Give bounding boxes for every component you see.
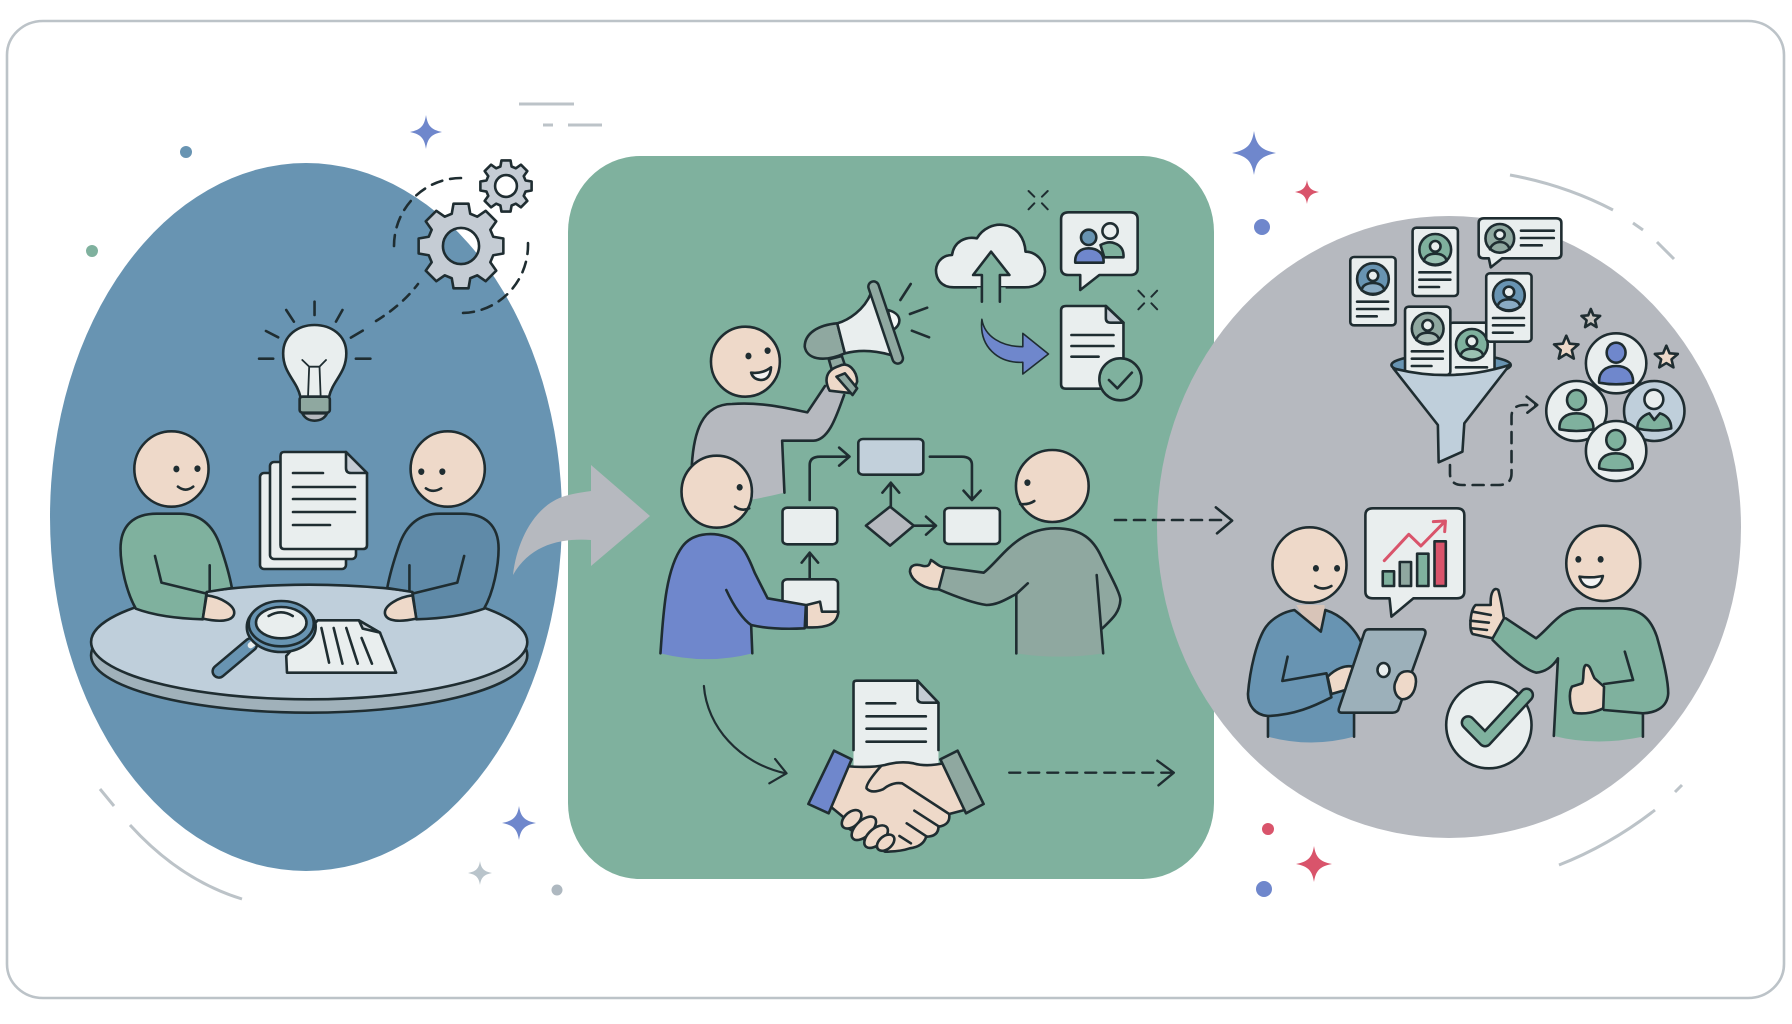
- sparkle: red upper right: [1295, 180, 1319, 204]
- dot: blue lower right: [1256, 881, 1272, 897]
- dot: blue top left: [180, 146, 192, 158]
- icon: light bulb: [259, 302, 370, 421]
- scene: execution upper: [660, 191, 1157, 659]
- table: [91, 585, 527, 713]
- person: analyst with tablet: [1248, 527, 1425, 742]
- dot: blue upper right: [1254, 219, 1270, 235]
- icon: document stack: [260, 452, 367, 569]
- icon: megaphone: [805, 284, 929, 395]
- dot: green left: [86, 245, 98, 257]
- arrow: large gray arrow between research and execution: [513, 465, 650, 575]
- icon: funnel: [1393, 365, 1510, 462]
- chart bubble: [1365, 508, 1464, 617]
- arrow: dashed funnel output: [1450, 397, 1537, 485]
- panel: execution green rounded square: [568, 156, 1214, 879]
- decorations: sparkles, dots and arcs: [86, 115, 1332, 897]
- arrow: dashed to results upper: [1115, 519, 1228, 521]
- icon: rating stars: [1554, 309, 1678, 367]
- sparkle: blue bottom: [502, 806, 536, 840]
- dot: red lower right: [1262, 823, 1274, 835]
- icon: upload cloud: [936, 225, 1045, 303]
- icon: chat bubble with users: [1061, 212, 1138, 290]
- icon: selected team circle: [1546, 333, 1684, 481]
- panel: results gray circle: [1157, 216, 1741, 838]
- icon: gears with dashed orbit: [376, 160, 532, 321]
- icon: approved document: [1061, 306, 1141, 400]
- person: happy colleague: [1470, 526, 1668, 742]
- arrow: blue curved: [982, 319, 1048, 374]
- icon: funnel rim back: [1391, 354, 1511, 376]
- arrow: dashed to results lower: [1009, 761, 1174, 785]
- round table with magnifier and paper: [91, 585, 527, 713]
- icon: check badge: [1446, 682, 1532, 768]
- person: speaker with megaphone: [692, 327, 844, 499]
- icon: contract document: [854, 681, 938, 767]
- profile cards: [1350, 228, 1532, 391]
- sparkle: large blue upper right: [1232, 131, 1276, 175]
- scene: research: [91, 160, 532, 713]
- person: blue with flowchart card: [660, 456, 838, 659]
- chat profile card: [1479, 218, 1561, 267]
- scene: results candidates: [1350, 218, 1684, 485]
- person: left researcher in green: [121, 431, 234, 621]
- sparkle: pale gray bottom: [468, 861, 492, 885]
- decorative lines: [100, 104, 1682, 899]
- paper on table: [286, 620, 396, 673]
- arrow: head of dashed arrow: [1216, 507, 1232, 533]
- person: gray-green collaborator: [910, 450, 1120, 657]
- scene: results people: [1216, 507, 1668, 768]
- arrow: curved to handshake: [704, 686, 787, 783]
- sparkle marks: [1029, 191, 1157, 309]
- sparkle: red lower right: [1296, 846, 1332, 882]
- flowchart: [783, 439, 1000, 614]
- icon: handshake: [808, 751, 984, 854]
- dot: gray bottom: [552, 884, 562, 896]
- person: right researcher in blue: [385, 431, 499, 621]
- icon: magnifier: [219, 601, 316, 671]
- scene: handshake agreement: [704, 681, 1174, 854]
- panel: research blue oval: [50, 163, 562, 871]
- sparkle: blue top: [410, 115, 442, 149]
